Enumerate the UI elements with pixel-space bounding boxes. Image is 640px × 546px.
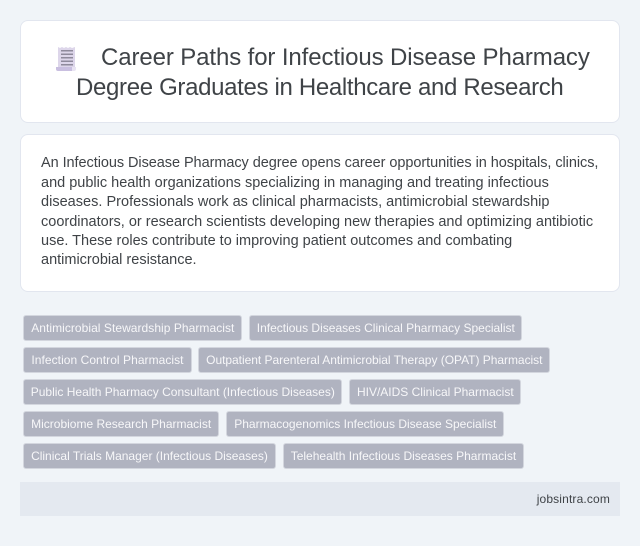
tag [198, 347, 550, 373]
text block: introduction paragraph: antimicrobial resistance. [41, 252, 197, 268]
tag [283, 443, 524, 469]
tag: Telehealth Infectious Diseases Pharmacist [291, 449, 516, 463]
tag: Antimicrobial Stewardship Pharmacist [31, 321, 234, 335]
tag [249, 315, 522, 341]
tag: Clinical Trials Manager (Infectious Diseases) [31, 449, 268, 463]
tag [23, 411, 219, 437]
text block: introduction paragraph: and public health organizations specializing in managing and treating infectious [41, 175, 549, 191]
text block: introduction paragraph: coordinators, or research scientists developing new therapies and optimizing antibiotic [41, 214, 593, 230]
tag [23, 443, 276, 469]
tag: Pharmacogenomics Infectious Disease Specialist [234, 417, 496, 431]
title: Career Paths for Infectious Disease Pharmacy [101, 44, 590, 71]
text block: introduction paragraph: use. These roles contribute to improving patient outcomes and combating [41, 233, 512, 249]
panel: introduction [20, 134, 620, 292]
panel: career tags [23, 315, 550, 469]
tag [23, 379, 342, 405]
tag [23, 315, 242, 341]
tag [226, 411, 504, 437]
title: Degree Graduates in Healthcare and Research [76, 74, 563, 101]
footer [20, 482, 620, 516]
panel: title card [20, 20, 620, 123]
title [76, 44, 590, 101]
tag [23, 347, 192, 373]
footer source text: jobsintra.com [537, 492, 610, 506]
text block: introduction paragraph: diseases. Professionals work as clinical pharmacists, antimicrobial stewardship [41, 194, 549, 210]
tag: Public Health Pharmacy Consultant (Infectious Diseases) [31, 385, 335, 399]
text block: introduction paragraph: An Infectious Disease Pharmacy degree opens career opportunities in hospitals, clinics, [41, 155, 598, 171]
tag: Outpatient Parenteral Antimicrobial Therapy (OPAT) Pharmacist [206, 353, 542, 367]
icon: document scroll [56, 47, 76, 71]
tag: Infectious Diseases Clinical Pharmacy Specialist [257, 321, 515, 335]
tag [349, 379, 521, 405]
tag: HIV/AIDS Clinical Pharmacist [357, 385, 514, 399]
text block: introduction paragraph [41, 155, 598, 268]
tag: Infection Control Pharmacist [31, 353, 184, 367]
tag: Microbiome Research Pharmacist [31, 417, 211, 431]
